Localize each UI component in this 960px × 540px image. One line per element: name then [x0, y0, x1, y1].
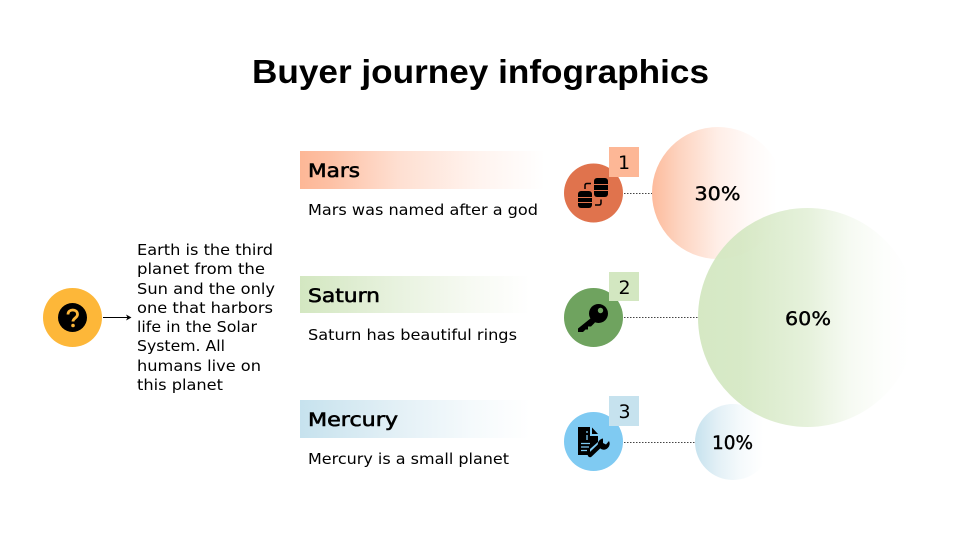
label bar: Mercury [300, 400, 530, 438]
text: Saturn description: Saturn has beautiful rings [308, 326, 517, 344]
text block: Earth description: one that harbors [137, 299, 273, 317]
icon: question mark [43, 288, 102, 347]
panel: Saturn [300, 272, 698, 347]
bubble: 60% [698, 208, 917, 427]
badge: 3 [609, 396, 639, 426]
label bar: Saturn [300, 276, 530, 313]
text block: Earth description: this planet [137, 376, 223, 394]
text block: Earth description [137, 241, 275, 394]
bubble: 30%: 30% [694, 183, 740, 205]
text block: Earth description: Sun and the only [137, 280, 275, 298]
heading: Mars: Mars [308, 160, 360, 182]
bubble: 30% [652, 127, 784, 259]
icon: document and wrench [564, 412, 623, 471]
badge: 2: 2 [618, 277, 631, 299]
panel: Mars [300, 147, 652, 222]
label bar: Mars [300, 151, 545, 189]
arrow [103, 314, 132, 320]
text block: Earth description: Earth is the third [137, 241, 273, 259]
bubble: 10% [695, 404, 771, 480]
heading: Mercury: Mercury [308, 409, 398, 431]
connector: Mars [624, 192, 652, 194]
badge: 1: 1 [618, 152, 630, 174]
connector: Saturn [624, 316, 698, 318]
text: Mercury description: Mercury is a small planet [308, 450, 509, 468]
heading: Saturn: Saturn [308, 285, 380, 307]
bubble: 60%: 60% [785, 308, 831, 330]
panel: Mercury [300, 396, 695, 471]
connector: Mercury [624, 442, 695, 444]
bubble: 10%: 10% [712, 432, 753, 454]
text block: Earth description: planet from the [137, 260, 265, 278]
title: Buyer journey infographics [252, 53, 709, 90]
icon: key [564, 288, 623, 347]
text block: Earth description: life in the Solar [137, 318, 258, 336]
badge: 1 [609, 147, 639, 177]
text: Mars description: Mars was named after a god [308, 201, 538, 219]
icon: database exchange [564, 164, 623, 222]
text block: Earth description: humans live on [137, 357, 261, 375]
badge: 3: 3 [618, 401, 631, 423]
text block: Earth description: System. All [137, 337, 225, 355]
badge: 2 [609, 272, 639, 301]
